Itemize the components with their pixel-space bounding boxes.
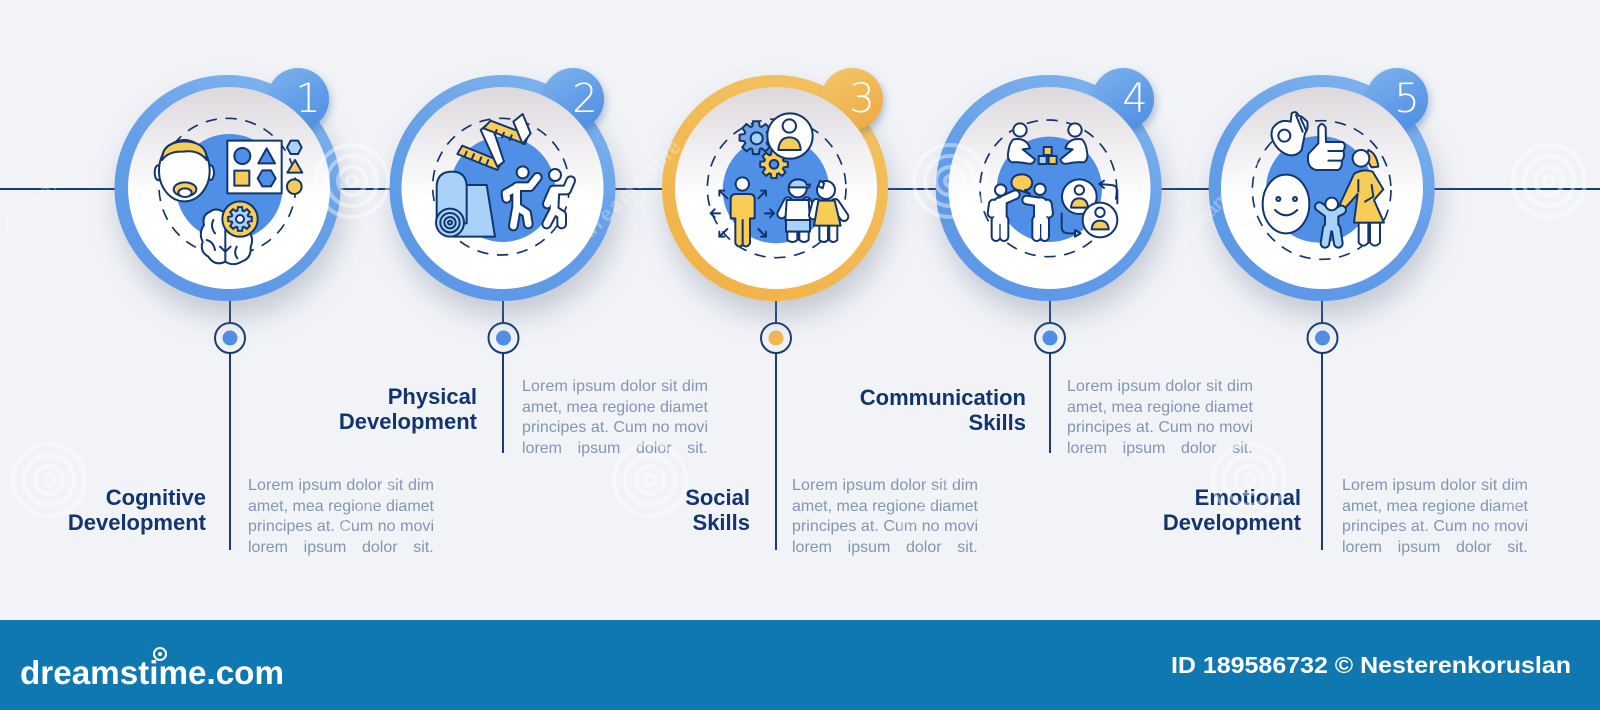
text block 2: lorem ipsum dolor sit. [522,440,708,457]
badge 5: 5 [1394,76,1420,122]
badge 4: 4 [1122,76,1148,122]
badge 5 [1366,68,1428,130]
text block 4 [1067,378,1254,457]
text block 3: lorem ipsum dolor sit. [792,539,978,556]
text block 3: Lorem ipsum dolor sit dim [792,477,978,494]
timeline node 5 [1308,323,1338,353]
badge 1 [267,68,329,130]
text block 1: principes at. Cum no movi [248,518,434,535]
text: dreamstime [1178,150,1271,244]
text block 5 [1342,477,1529,556]
heading: Social Skills: Social [685,485,750,510]
timeline node 3 [761,323,791,353]
text block 2: principes at. Cum no movi [522,419,708,436]
heading: Communication Skills: Communication [860,385,1026,410]
text block 5: principes at. Cum no movi [1342,518,1528,535]
text: dreamstime [893,445,986,539]
heading: Emotional Development: Development [1163,510,1302,535]
text block 3 [792,477,979,556]
step 3: social skills [662,68,979,556]
icon: ok hand, thumbs up, smile and family [1252,112,1391,259]
text block 4: amet, mea regione diamet [1067,399,1254,416]
text block 4: lorem ipsum dolor sit. [1067,440,1253,457]
heading: Emotional Development: Emotional [1195,485,1301,510]
badge 3: 3 [849,76,875,122]
icon: people and gears [707,113,846,258]
ring 4 [936,75,1162,301]
text block 3: amet, mea regione diamet [792,498,979,515]
icon: baby, shapes and brain [155,118,302,264]
timeline node 4 [1035,323,1065,353]
ring 2 [390,75,616,301]
step 4: communication skills [860,68,1254,457]
heading: Communication Skills: Skills [969,410,1026,435]
image credit: ID 189586732 © Nesterenkoruslan [1171,652,1571,678]
text: dreamstime [1478,445,1571,539]
text: dreamstime [0,131,105,239]
text block 1: lorem ipsum dolor sit. [248,539,434,556]
step 2: physical development [339,68,709,457]
ring 5 [1209,75,1435,301]
text block 2 [522,378,709,457]
text block 2: amet, mea regione diamet [522,399,709,416]
timeline node 2 [488,323,518,353]
text: dreamstime [578,136,685,244]
text block 1: Lorem ipsum dolor sit dim [248,477,434,494]
step 1: cognitive development [68,68,435,556]
icon: children, conversation and profiles [980,120,1117,257]
timeline node 1 [215,323,245,353]
footer banner [0,620,1600,710]
heading: Physical Development: Physical [388,384,477,409]
text block 4: principes at. Cum no movi [1067,419,1253,436]
heading: Physical Development: Development [339,409,478,434]
text block 2: Lorem ipsum dolor sit dim [522,378,708,395]
badge 4 [1092,68,1154,130]
ring 3 [662,75,888,301]
badge 2: 2 [572,76,598,122]
heading: Cognitive Development: Development [68,510,207,535]
text block 5: amet, mea regione diamet [1342,498,1529,515]
badge 1: 1 [295,76,321,122]
heading: Social Skills: Skills [693,510,750,535]
text block 1: amet, mea regione diamet [248,498,435,515]
text block 5: Lorem ipsum dolor sit dim [1342,477,1528,494]
text: dreamstime [333,445,426,539]
text block 3: principes at. Cum no movi [792,518,978,535]
text block 5: lorem ipsum dolor sit. [1342,539,1528,556]
step 5: emotional development [1163,68,1529,556]
badge 2 [542,68,604,130]
heading: Cognitive Development: Cognitive [106,485,206,510]
text block 1 [248,477,435,556]
ring 1 [114,75,340,301]
logo: dreamstime.com: dreamstime.com [20,654,284,691]
icon: mat, tape and dancers [433,114,571,255]
badge 3 [821,68,883,130]
text block 4: Lorem ipsum dolor sit dim [1067,378,1253,395]
